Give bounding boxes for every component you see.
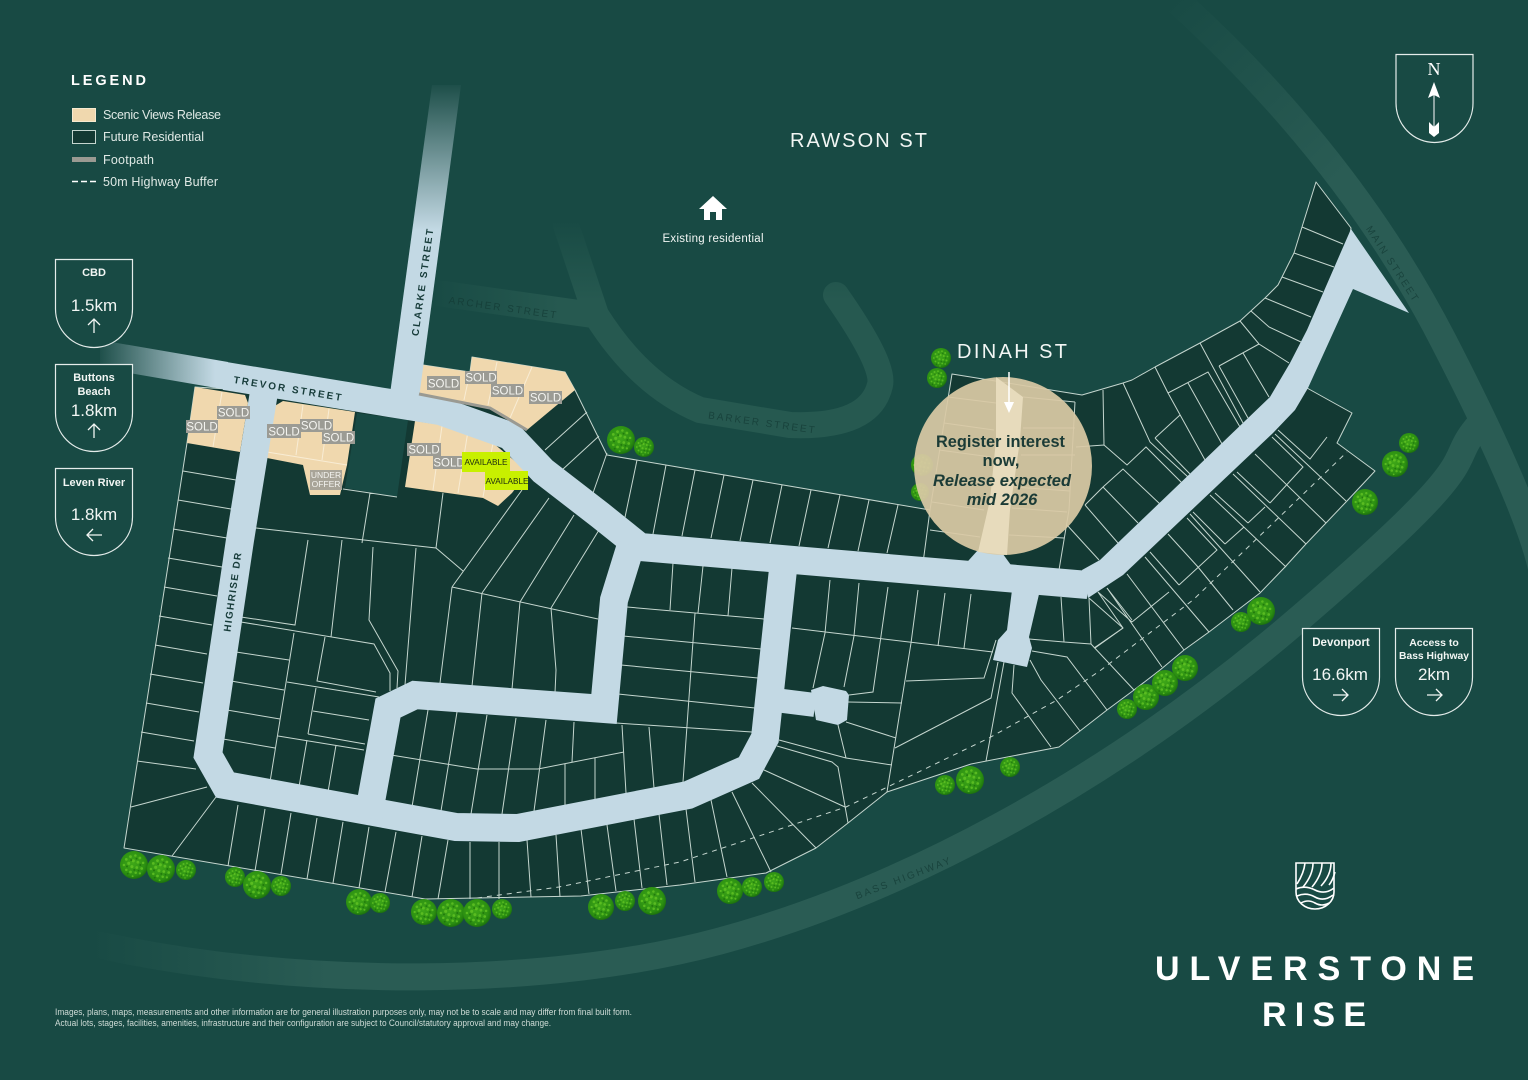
rawson st label: RAWSON ST <box>790 130 927 152</box>
trees <box>120 348 1419 927</box>
sold and availability tags: OFFER <box>312 479 340 489</box>
badge: Access to Bass Highway <box>1396 628 1472 716</box>
badge: Access to Bass Highway: Access to <box>1409 637 1459 649</box>
street names: BARKER STREET <box>707 410 817 437</box>
sold and availability tags <box>186 371 562 490</box>
badge: Buttons Beach: 1.8km <box>71 401 117 420</box>
street names: MAIN STREET <box>1363 224 1421 305</box>
badge: CBD: CBD <box>82 267 106 279</box>
sold and availability tags: SOLD <box>465 372 497 384</box>
lot boundary lines <box>131 227 1346 899</box>
legend <box>71 73 221 189</box>
icon: north arrow shield <box>1396 54 1473 142</box>
legend: Scenic Views Release <box>103 108 221 122</box>
road network <box>100 85 1409 828</box>
badge: Leven River: 1.8km <box>71 505 117 524</box>
scenic views release lots <box>187 357 575 506</box>
callout: register interest circle: Release expected <box>933 472 1072 490</box>
badge: Leven River: Leven River <box>63 477 126 489</box>
disclaimer text <box>55 1007 632 1028</box>
icon: ulverstone rise logo crest <box>1296 863 1335 909</box>
footpath <box>419 394 527 430</box>
sold and availability tags: AVAILABLE <box>465 458 508 467</box>
sold and availability tags: AVAILABLE <box>486 477 529 486</box>
sold and availability tags: SOLD <box>428 378 459 390</box>
callout: register interest circle <box>914 377 1092 555</box>
legend: LEGEND <box>71 73 146 89</box>
lots: future residential area <box>124 182 1375 899</box>
disclaimer text: Images, plans, maps, measurements and other information are for general illustration purposes only, may not be to scale and may differ from final built form. <box>55 1007 632 1017</box>
street names: CLARKE STREET <box>410 226 437 337</box>
sold and availability tags: SOLD <box>408 444 440 456</box>
badge: CBD <box>56 260 132 347</box>
street names: ARCHER STREET <box>448 295 559 322</box>
public open space block <box>345 413 408 497</box>
icon: house <box>699 196 727 220</box>
sold and availability tags: SOLD <box>492 386 523 398</box>
brand name: ULVERSTONE <box>1155 950 1474 988</box>
sold and availability tags: SOLD <box>530 392 561 404</box>
badge: Devonport <box>1302 628 1380 716</box>
existing residential label: Existing residential <box>662 233 764 245</box>
sold and availability tags: SOLD <box>433 458 465 470</box>
arrow: dinah st <box>1004 372 1014 413</box>
street names <box>222 224 1421 902</box>
street names: BASS HIGHWAY <box>854 855 954 902</box>
sold and availability tags: SOLD <box>301 420 332 432</box>
50m highway buffer dashed line <box>477 452 1347 898</box>
badge: Buttons Beach <box>56 364 132 451</box>
callout: register interest circle: now, <box>983 452 1019 470</box>
icon: north arrow shield: N <box>1428 59 1440 79</box>
legend: 50m Highway Buffer <box>103 175 218 189</box>
sold and availability tags: SOLD <box>218 408 249 420</box>
dinah st label: DINAH ST <box>957 341 1067 363</box>
badge: Leven River <box>56 468 132 555</box>
badge: CBD: 1.5km <box>71 296 117 315</box>
sold and availability tags: SOLD <box>268 426 300 438</box>
badge: Buttons Beach: Beach <box>77 386 111 398</box>
disclaimer text: Actual lots, stages, facilities, amenities, infrastructure and their configuration are subject to Council/statutory approval and may change. <box>55 1018 551 1028</box>
badge: Buttons Beach: Buttons <box>73 372 115 384</box>
badge: Devonport: 16.6km <box>1312 665 1368 684</box>
brand name: RISE <box>1262 996 1366 1034</box>
legend: Future Residential <box>103 130 204 144</box>
sold and availability tags: UNDER <box>311 470 341 480</box>
legend: Footpath <box>103 153 154 167</box>
brand name <box>1155 950 1474 1034</box>
street names: HIGHRISE DR <box>222 551 245 633</box>
callout: register interest circle: Register interest <box>936 433 1065 451</box>
badge: Access to Bass Highway: 2km <box>1418 665 1450 684</box>
badge: Devonport: Devonport <box>1312 637 1370 649</box>
callout: register interest circle: mid 2026 <box>967 491 1038 509</box>
sold and availability tags: SOLD <box>323 432 354 444</box>
sold and availability tags: SOLD <box>186 422 218 434</box>
badge: Access to Bass Highway: Bass Highway <box>1399 650 1469 662</box>
street names: TREVOR STREET <box>233 375 344 404</box>
